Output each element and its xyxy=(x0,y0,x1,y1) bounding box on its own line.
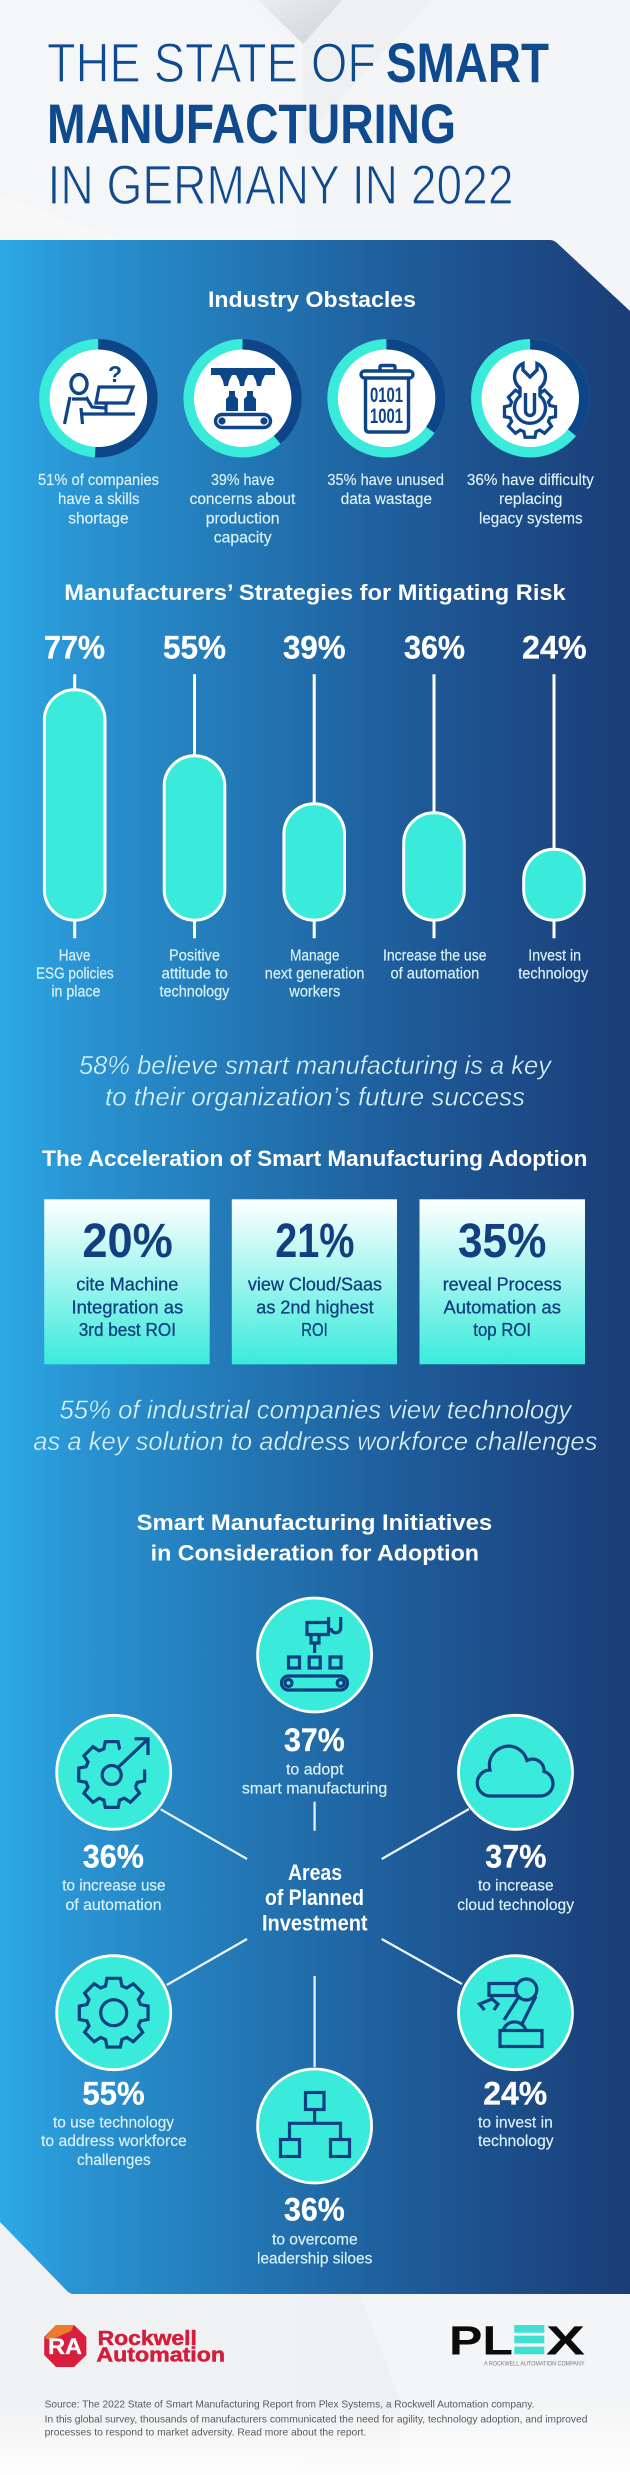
caption: skills shortage: shortage xyxy=(68,510,129,527)
logo: plex: X xyxy=(546,2317,585,2363)
card: cloud saas: 21% xyxy=(275,1215,354,1268)
title xyxy=(47,31,549,216)
card: process automation: top ROI xyxy=(473,1320,531,1340)
node: adopt smart manufacturing: 37% xyxy=(284,1722,345,1758)
center label: areas of planned investment xyxy=(262,1860,368,1936)
pill bar: 77 percent: in place xyxy=(51,984,100,1001)
node: increase use of automation xyxy=(57,1715,171,1914)
section: acceleration of adoption xyxy=(42,1146,587,1364)
card: machine integration: Integration as xyxy=(72,1297,183,1317)
donut: skills shortage xyxy=(44,344,152,452)
source note xyxy=(45,2398,588,2438)
pill bar: 77 percent xyxy=(36,629,114,1001)
title: THE STATE OF xyxy=(47,31,376,94)
icon: robot over conveyor xyxy=(282,1617,348,1690)
heading: initiatives xyxy=(137,1510,492,1566)
node: increase cloud technology: cloud technology xyxy=(457,1897,574,1914)
node: increase cloud technology xyxy=(457,1715,574,1914)
pill bar: 24 percent: 24% xyxy=(522,629,587,665)
icon: wrench and gear xyxy=(504,364,556,437)
pill bar: 39 percent: next generation xyxy=(265,966,364,983)
card: machine integration: 20% xyxy=(82,1215,173,1268)
node: adopt smart manufacturing: smart manufacturing xyxy=(242,1780,387,1797)
node: increase use of automation: of automation xyxy=(66,1897,162,1914)
caption: production capacity: capacity xyxy=(214,529,272,546)
card: machine integration xyxy=(44,1199,210,1364)
callout: 55 percent statement: as a key solution to address workforce challenges xyxy=(33,1426,597,1456)
title: SMART xyxy=(386,31,549,94)
pill bar: 55 percent: 55% xyxy=(163,629,226,665)
node: invest in technology: to invest in xyxy=(478,2114,553,2131)
icon: cloud xyxy=(477,1746,553,1796)
caption: production capacity xyxy=(190,472,296,546)
pill bar: 77 percent: 77% xyxy=(44,629,105,665)
source note: Source: The 2022 State of Smart Manufacturing Report from Plex Systems, a Rockwell Automation company. xyxy=(45,2398,534,2410)
caption: legacy systems: replacing xyxy=(499,491,562,508)
caption: skills shortage: have a skills xyxy=(58,491,140,508)
node: increase use of automation: to increase use xyxy=(62,1878,166,1895)
donut: data wastage xyxy=(333,344,441,452)
pill bar: 39 percent: Manage xyxy=(290,948,340,965)
heading: strategies: Manufacturers’ Strategies for Mitigating Risk xyxy=(64,580,566,605)
node: address workforce challenges: challenges xyxy=(77,2152,151,2169)
icon: data bin: 0101 xyxy=(370,384,403,407)
card: process automation: Automation as xyxy=(444,1297,561,1317)
card: process automation: reveal Process xyxy=(443,1275,562,1295)
heading: acceleration: The Acceleration of Smart Manufacturing Adoption xyxy=(42,1146,587,1171)
pill bar: 55 percent: attitude to xyxy=(162,966,228,983)
caption: skills shortage: 51% of companies xyxy=(38,472,159,489)
connector lines xyxy=(161,1802,469,2067)
node: increase cloud technology: 37% xyxy=(485,1839,546,1875)
node: increase cloud technology: to increase xyxy=(478,1878,554,1895)
pill bar: 36 percent: Increase the use xyxy=(383,948,486,965)
node: address workforce challenges: to use technology xyxy=(53,2114,174,2131)
icon: person at computer: ? xyxy=(108,361,122,387)
center label: areas of planned investment: Areas xyxy=(288,1860,342,1885)
heading: industry obstacles: Industry Obstacles xyxy=(208,287,416,312)
pill bar: 55 percent xyxy=(160,629,230,1001)
title: IN GERMANY IN 2022 xyxy=(48,153,514,216)
node: overcome leadership siloes: to overcome xyxy=(272,2231,358,2248)
node: address workforce challenges: to address workforce xyxy=(41,2133,187,2150)
card: process automation: 35% xyxy=(458,1215,546,1268)
pill bar: 39 percent xyxy=(265,629,364,1001)
logo: plex xyxy=(449,2317,585,2368)
card: cloud saas: view Cloud/Saas xyxy=(248,1275,382,1295)
callout: 58 percent statement xyxy=(79,1050,553,1112)
node: adopt smart manufacturing: to adopt xyxy=(286,1761,344,1778)
caption: data wastage: data wastage xyxy=(341,491,432,508)
donut: legacy systems xyxy=(476,344,584,452)
caption: skills shortage xyxy=(38,472,159,527)
pill bar: 36 percent xyxy=(383,629,486,983)
logo: rockwell automation xyxy=(44,2325,225,2367)
caption: legacy systems: 36% have difficulty xyxy=(467,472,594,489)
pill bar: 24 percent: Invest in xyxy=(528,948,581,965)
card: cloud saas xyxy=(232,1199,397,1364)
pill bar: 24 percent xyxy=(518,629,588,983)
node: increase use of automation: 36% xyxy=(83,1839,144,1875)
pill bar: 55 percent: Positive xyxy=(169,948,220,965)
section: initiatives hub diagram xyxy=(41,1510,574,2267)
pill bar: 77 percent: ESG policies xyxy=(36,966,114,983)
card: machine integration: 3rd best ROI xyxy=(79,1320,176,1340)
node: invest in technology: 24% xyxy=(483,2075,547,2111)
heading: initiatives: in Consideration for Adoption xyxy=(151,1541,479,1566)
logo: rockwell automation: RA xyxy=(48,2334,82,2359)
callout: 58 percent statement: 58% believe smart manufacturing is a key xyxy=(79,1050,553,1080)
node: invest in technology: technology xyxy=(478,2133,554,2150)
node: address workforce challenges: 55% xyxy=(82,2075,145,2111)
pill bar: 39 percent: workers xyxy=(288,984,341,1001)
caption: production capacity: production xyxy=(206,510,280,527)
pill bar: 77 percent: Have xyxy=(59,948,90,965)
pill bar: 55 percent: technology xyxy=(160,984,230,1001)
caption: data wastage xyxy=(327,472,444,508)
node: overcome leadership siloes: leadership siloes xyxy=(257,2250,372,2267)
donut: production capacity xyxy=(189,344,297,452)
title: MANUFACTURING xyxy=(47,92,456,155)
caption: data wastage: 35% have unused xyxy=(327,472,444,489)
icon: filling conveyor xyxy=(211,368,275,428)
node: invest in technology xyxy=(458,1956,572,2150)
card: cloud saas: as 2nd highest xyxy=(256,1297,374,1317)
heading: initiatives: Smart Manufacturing Initiatives xyxy=(137,1510,492,1535)
pill bar: 24 percent: technology xyxy=(518,966,588,983)
node: overcome leadership siloes: 36% xyxy=(284,2192,345,2228)
caption: legacy systems xyxy=(467,472,594,527)
logo: rockwell automation: Rockwell xyxy=(98,2328,197,2350)
caption: production capacity: 39% have xyxy=(211,472,274,489)
pill bar: 36 percent: 36% xyxy=(404,629,465,665)
logo: plex: A ROCKWELL AUTOMATION COMPANY xyxy=(484,2361,585,2368)
icon: gear with arrow xyxy=(79,1739,148,1807)
source note: processes to respond to market adversity. Read more about the report. xyxy=(45,2426,366,2438)
pill bar: 36 percent: of automation xyxy=(390,966,479,983)
callout: 55 percent statement xyxy=(33,1394,597,1456)
card: process automation xyxy=(420,1199,585,1364)
center label: areas of planned investment: Investment xyxy=(262,1911,368,1936)
logo: rockwell automation: Automation xyxy=(96,2345,225,2367)
card: cloud saas: ROI xyxy=(301,1320,328,1340)
icon: gear xyxy=(79,1978,148,2047)
callout: 58 percent statement: to their organization’s future success xyxy=(105,1082,525,1112)
caption: legacy systems: legacy systems xyxy=(479,510,583,527)
icon: robot arm xyxy=(480,1979,542,2046)
callout: 55 percent statement: 55% of industrial companies view technology xyxy=(60,1394,573,1424)
node: address workforce challenges xyxy=(41,1956,187,2169)
source note: In this global survey, thousands of manufacturers communicated the need for agility, technology adoption, and improved xyxy=(45,2414,588,2426)
card: machine integration: cite Machine xyxy=(76,1275,178,1295)
icon: data bin xyxy=(361,366,413,432)
section: mitigating risk strategies xyxy=(36,580,588,1001)
center label: areas of planned investment: of Planned xyxy=(265,1885,364,1910)
logo: plex: PL xyxy=(449,2317,513,2363)
section: industry obstacles xyxy=(38,287,594,546)
pill bar: 39 percent: 39% xyxy=(283,629,346,665)
caption: production capacity: concerns about xyxy=(190,491,296,508)
icon: data bin: 1001 xyxy=(370,405,403,428)
node: overcome leadership siloes xyxy=(257,2069,372,2267)
icon: org chart xyxy=(280,2092,350,2156)
node: adopt smart manufacturing xyxy=(242,1598,387,1797)
